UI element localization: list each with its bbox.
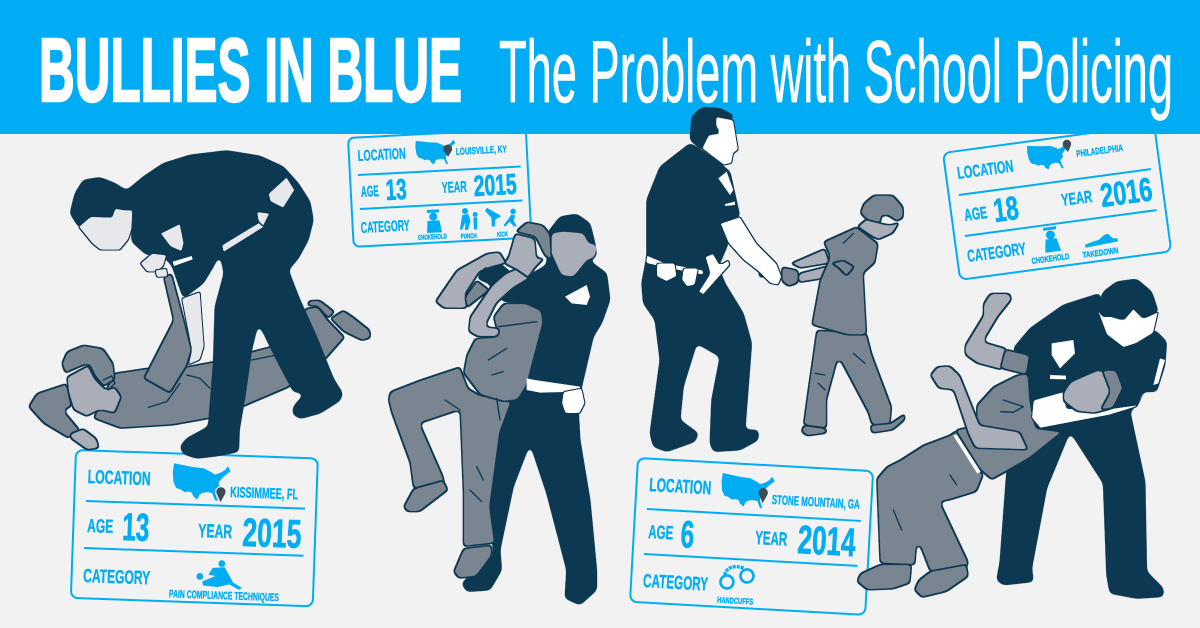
age value: 13 [385, 174, 407, 207]
student fist [1063, 370, 1113, 413]
card: Philadelphia incident [943, 124, 1171, 280]
student wrist [155, 268, 168, 277]
handcuffs [782, 267, 798, 287]
age: AGE [360, 183, 379, 201]
child head [857, 195, 903, 240]
year value: 2016 [1098, 170, 1154, 214]
icon: takedown [1084, 232, 1118, 248]
icon: chokehold [1042, 226, 1061, 253]
year value: 2014 [796, 518, 857, 565]
category: CATEGORY [83, 566, 151, 589]
scene: officer choking student [388, 214, 610, 605]
city: LOUISVILLE, KY [456, 144, 507, 158]
officer badge [1050, 340, 1165, 385]
title: BULLIES IN BLUE [39, 21, 462, 121]
header band [0, 0, 1200, 134]
student raised arm [965, 293, 1012, 370]
child arms [790, 248, 847, 283]
student cuff sleeve [1100, 370, 1123, 410]
location label: LOCATION [956, 157, 1015, 183]
label: chokehold: CHOKEHOLD [418, 233, 447, 242]
card: Kissimmee incident [71, 450, 318, 606]
scene: officer pinning student to ground [28, 151, 371, 458]
card: Stone Mountain incident [630, 458, 873, 615]
icon: map pin [758, 488, 768, 503]
city: STONE MOUNTAIN, GA [771, 492, 861, 512]
year value: 2015 [473, 169, 518, 203]
student body [28, 345, 300, 450]
student belt [953, 434, 981, 474]
officer silhouette [70, 151, 343, 458]
icon: map pin [1062, 139, 1072, 153]
student front arm [930, 366, 1028, 450]
category: CATEGORY [360, 217, 410, 237]
card: Louisville incident [348, 129, 531, 247]
officer hand [140, 253, 167, 272]
category: CATEGORY [643, 571, 709, 596]
officer face [552, 232, 597, 277]
label: punch: PUNCH [461, 233, 477, 241]
label: handcuffs: HANDCUFFS [717, 595, 754, 607]
age: AGE [648, 522, 674, 544]
icon: punch [459, 207, 478, 230]
clothing creases [893, 400, 1023, 530]
student head [62, 345, 122, 417]
location label: LOCATION [357, 146, 406, 165]
label: takedown: TAKEDOWN [1082, 245, 1119, 260]
icon: chokehold [426, 209, 442, 233]
student raised arm [143, 273, 192, 393]
age: AGE [87, 516, 114, 538]
student head [503, 222, 552, 278]
icon: handcuffs [720, 566, 754, 590]
handcuff key [757, 270, 767, 278]
student shoes [857, 564, 968, 598]
officer hair [1097, 279, 1158, 320]
label: kick: KICK [497, 231, 508, 239]
child shirt [812, 227, 878, 335]
age value: 13 [122, 506, 150, 550]
icon: map pin [216, 487, 226, 502]
category: CATEGORY [966, 239, 1027, 266]
officer face [1097, 308, 1158, 348]
year value: 2015 [242, 511, 302, 557]
icon: US map [720, 473, 775, 509]
student sleeve [1000, 349, 1030, 375]
city: KISSIMMEE, FL [230, 484, 298, 503]
scene: officer taking down student [857, 279, 1167, 598]
location label: LOCATION [87, 467, 151, 490]
icon: map pin [443, 144, 453, 157]
student shirt [955, 373, 1063, 480]
officer badge [160, 223, 184, 252]
icon: kick [485, 206, 517, 228]
age value: 6 [679, 514, 695, 557]
officer arm reaching down [182, 292, 204, 365]
officer belt and pouch [527, 378, 585, 413]
year: YEAR [198, 521, 233, 543]
student shoes [403, 480, 492, 578]
child shoes [801, 413, 905, 436]
officer face [702, 117, 738, 165]
year: YEAR [755, 528, 788, 551]
student pants [877, 430, 983, 572]
label: pain compliance: PAIN COMPLIANCE TECHNIQUES [169, 588, 279, 604]
officer hair [690, 107, 733, 150]
clothing creases [445, 322, 537, 502]
officer badge [565, 285, 590, 305]
location label: LOCATION [649, 475, 712, 499]
year: YEAR [441, 179, 467, 197]
officer face [78, 208, 133, 250]
child sleeve [830, 260, 855, 277]
icon: pain compliance [196, 559, 243, 590]
officer badge [718, 172, 735, 206]
officer belt, pouches and holster [646, 253, 730, 295]
officer silhouette [997, 293, 1167, 598]
icon: US map [1026, 140, 1073, 173]
icon: US map [415, 139, 456, 166]
year: YEAR [1060, 187, 1093, 210]
scene: officer handcuffing child [642, 107, 905, 452]
officer arm [1032, 392, 1145, 428]
icon: US map [172, 463, 231, 502]
label: chokehold: CHOKEHOLD [1031, 251, 1070, 266]
officer arm [720, 217, 782, 285]
age: AGE [963, 203, 988, 225]
city: PHILADELPHIA [1076, 143, 1124, 160]
officer belt and holster [173, 177, 295, 266]
student far arm [435, 252, 507, 308]
student near arm [468, 268, 530, 337]
child pants [803, 330, 892, 428]
student shirt [463, 303, 543, 402]
student pants [388, 367, 512, 547]
student legs and shoes [277, 300, 371, 373]
officer forearm [477, 265, 540, 302]
officer silhouette [462, 214, 610, 605]
officer silhouette [642, 143, 758, 452]
clothing creases [815, 233, 865, 390]
age value: 18 [991, 189, 1021, 229]
